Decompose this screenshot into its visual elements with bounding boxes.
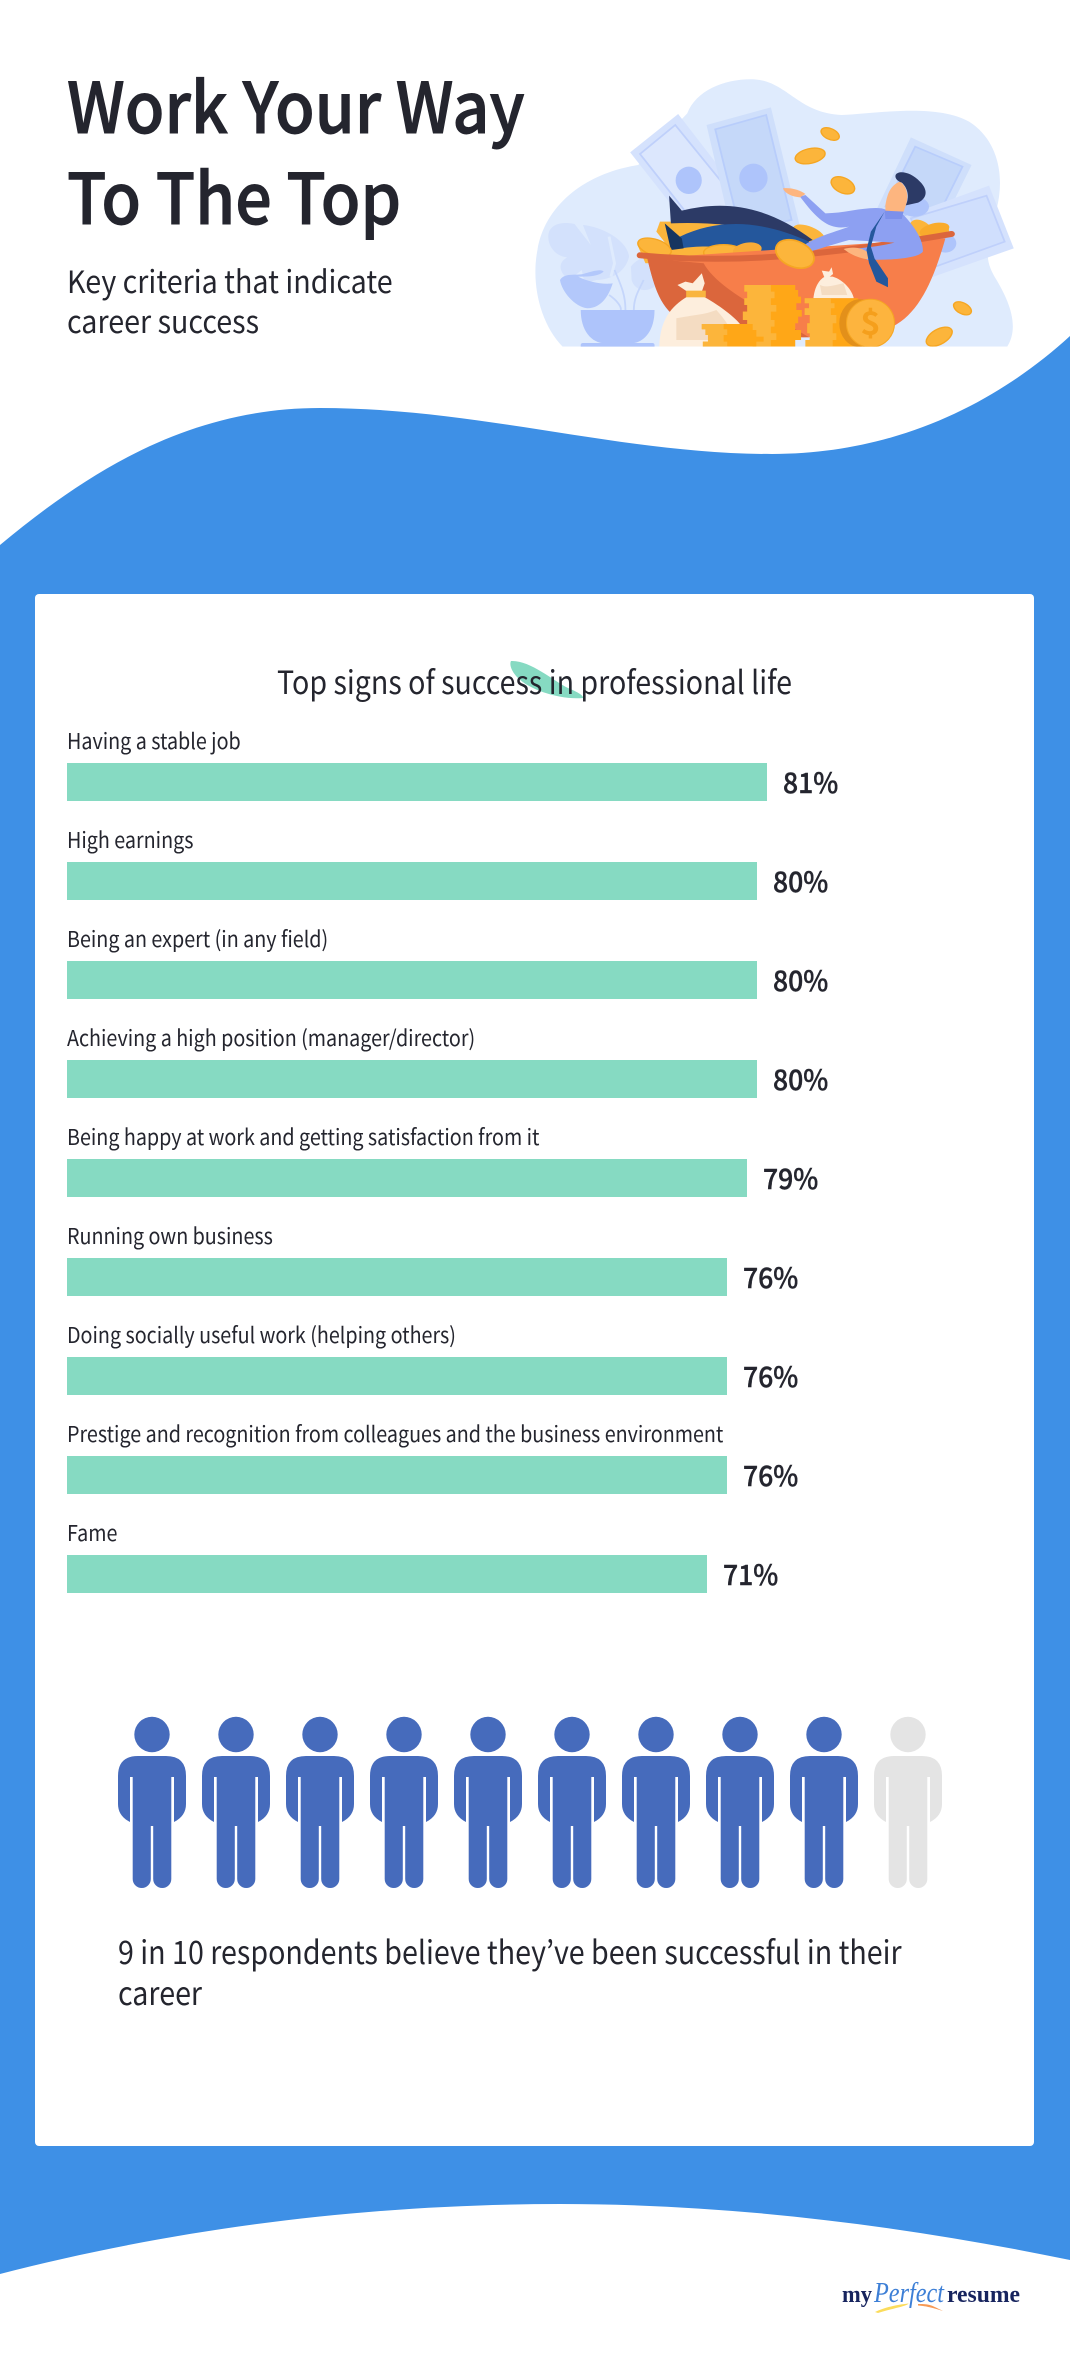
row: high earnings: 80%	[773, 859, 828, 900]
row: high position	[67, 1022, 828, 1098]
row: happy at work: Being happy at work and getting satisfaction from it	[67, 1121, 540, 1152]
legs	[669, 196, 813, 245]
row: socially useful	[67, 1319, 798, 1395]
row: stable job: Having a stable job	[67, 725, 241, 756]
title: To The Top	[67, 144, 401, 245]
row: prestige	[67, 1418, 798, 1494]
statistic caption: career	[118, 1968, 202, 2014]
row: high earnings	[67, 824, 828, 900]
subtitle: career success	[67, 297, 259, 342]
row: high earnings: High earnings	[67, 824, 193, 855]
row: stable job	[67, 725, 838, 801]
pictogram: 9 in 10 people	[118, 1717, 942, 1888]
row: socially useful: 76%	[743, 1354, 798, 1395]
statistic caption: 9 in 10 respondents believe they’ve been successful in their	[118, 1927, 902, 1973]
chart heading with leaf: Top signs of success in professional life	[277, 657, 792, 703]
icon: dollar coin: $	[860, 298, 881, 344]
subtitle	[67, 257, 393, 342]
coin heap behind rim	[910, 220, 950, 236]
icon: money bag small	[813, 267, 854, 298]
row: happy at work: 79%	[763, 1156, 818, 1197]
illustration: businessman relaxing in a tub of money	[535, 79, 1014, 350]
logo: myPerfectResume: resume	[947, 2282, 1020, 2308]
row: prestige: 76%	[743, 1453, 798, 1494]
panel: white card	[35, 594, 1034, 2146]
row: own business	[67, 1220, 798, 1296]
row: happy at work	[67, 1121, 818, 1197]
row: fame: 71%	[723, 1552, 778, 1593]
row: stable job: 81%	[783, 760, 838, 801]
row: expert: Being an expert (in any field)	[67, 923, 328, 954]
row: own business: 76%	[743, 1255, 798, 1296]
coins on top of tub	[637, 237, 672, 254]
logo: myPerfectResume: Perfect	[873, 2277, 945, 2309]
row: fame: Fame	[67, 1517, 117, 1548]
icon: coin stacks	[702, 285, 858, 347]
row: expert: 80%	[773, 958, 828, 999]
row: expert	[67, 923, 828, 999]
tie	[867, 212, 888, 287]
row: high position: Achieving a high position (manager/director)	[67, 1022, 475, 1053]
row: prestige: Prestige and recognition from colleagues and the business environment	[67, 1418, 723, 1449]
title	[67, 53, 525, 245]
row: high position: 80%	[773, 1057, 828, 1098]
icon: plant	[548, 223, 655, 350]
row: socially useful: Doing socially useful work (helping others)	[67, 1319, 456, 1350]
coin on rim	[774, 238, 815, 269]
icon: flying coins	[793, 125, 974, 350]
bar chart	[67, 725, 838, 1593]
tub	[647, 238, 945, 337]
statistic caption	[118, 1927, 902, 2014]
title: Work Your Way	[67, 53, 525, 154]
subtitle: Key criteria that indicate	[67, 257, 393, 302]
row: own business: Running own business	[67, 1220, 273, 1251]
icon: money bag large	[659, 273, 742, 347]
logo: myPerfectResume	[842, 2277, 1020, 2313]
logo: myPerfectResume: my	[842, 2282, 872, 2308]
man	[783, 172, 926, 287]
row: fame	[67, 1517, 778, 1593]
icon: dollar coin	[839, 298, 895, 347]
